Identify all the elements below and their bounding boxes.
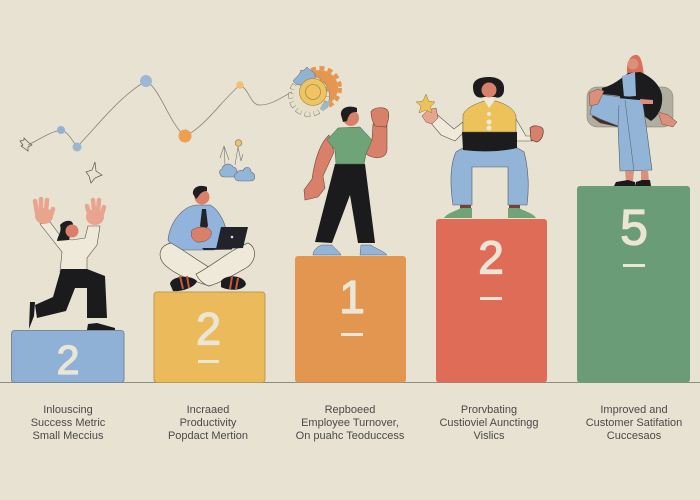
caption 3: Repboeed: [325, 404, 375, 416]
podium 3: orange: 1: [339, 271, 365, 323]
caption 5: Cuccesaos: [607, 430, 662, 442]
caption 3: Employee Turnover,: [301, 417, 399, 429]
podium 4: red: [436, 219, 547, 382]
caption 2: Incraaed: [187, 404, 229, 416]
icon: gears: [291, 67, 340, 114]
podium 1: blue: 2: [57, 337, 79, 383]
caption 3: On puahc Teoduccess: [296, 430, 405, 442]
caption 1: Success Metric: [31, 417, 106, 429]
caption 5: Improved and: [600, 404, 668, 416]
caption 2: Productivity: [180, 417, 237, 429]
podium 1: blue: [12, 330, 124, 383]
podium 5: green: 5: [620, 200, 648, 256]
figure: seated man with laptop: [160, 186, 255, 291]
caption 4: Vislics: [474, 430, 505, 442]
figure: standing woman by chair: [587, 55, 677, 186]
podium 2: yellow: [154, 292, 265, 382]
figure: standing man in green shirt: [304, 107, 389, 255]
podium 3: orange: [295, 256, 406, 382]
caption 4: Prorvbating: [461, 404, 517, 416]
figure: kneeling woman with raised hands: [29, 199, 115, 330]
podium 2: yellow: 2: [196, 304, 221, 354]
caption 1: Inlouscing: [43, 404, 93, 416]
figure: seated woman holding star: [416, 77, 543, 218]
icon: star lower: [86, 162, 102, 183]
caption 2: Popdact Mertion: [168, 430, 248, 442]
caption 1: Small Meccius: [33, 430, 104, 442]
caption 4: Custioviel Aunctingg: [439, 417, 539, 429]
podium 4: red: 2: [478, 232, 504, 284]
icon: clouds and arrows: [220, 140, 255, 181]
caption 5: Customer Satifation: [586, 417, 682, 429]
icon: star left: [20, 138, 32, 151]
trend line with nodes: [28, 75, 292, 152]
podium 5: green: [577, 186, 690, 382]
